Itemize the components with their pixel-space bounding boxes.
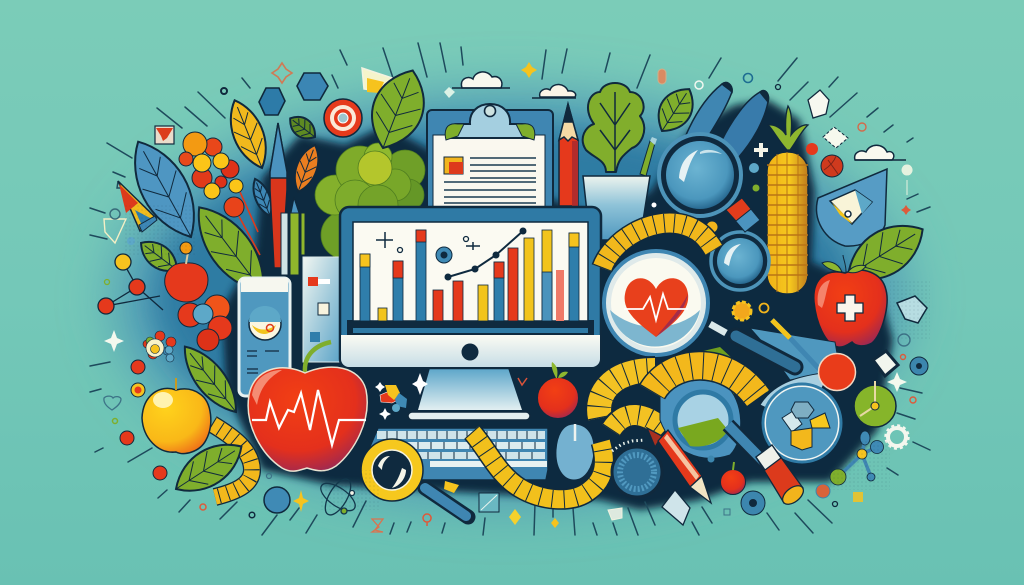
small top-left icons xyxy=(221,63,455,115)
icons under monitor xyxy=(375,373,527,420)
green leaf left xyxy=(134,195,279,304)
top right small icons xyxy=(521,62,912,215)
green dial xyxy=(854,381,896,427)
blue halo xyxy=(115,93,905,503)
radiating lines xyxy=(90,43,930,535)
keyboard xyxy=(362,428,548,480)
berries xyxy=(179,132,260,255)
phone xyxy=(239,278,290,396)
chart icons xyxy=(376,232,480,263)
leaves near apples xyxy=(166,338,251,504)
monitor stand xyxy=(408,368,530,420)
pencils cluster xyxy=(281,198,305,275)
power button xyxy=(462,344,478,360)
large magnifier xyxy=(659,134,741,216)
middle tapes xyxy=(599,370,665,430)
side panel xyxy=(303,257,341,362)
lower magnifier and swoosh xyxy=(660,376,792,490)
bar chart xyxy=(360,230,579,321)
inner blue shade xyxy=(155,126,855,470)
trend line xyxy=(445,228,526,280)
bottom small apple and discs xyxy=(708,456,863,515)
small pink icons xyxy=(117,126,174,188)
atom icon xyxy=(316,475,360,519)
flower and ring xyxy=(733,302,768,320)
red pencil lower xyxy=(647,428,711,503)
right red apple xyxy=(814,255,887,347)
small apple under monitor xyxy=(538,362,578,418)
leaves, upper left xyxy=(118,95,325,248)
potted plant xyxy=(583,83,650,240)
icon: molecule left xyxy=(98,237,163,314)
flower wheel icon xyxy=(143,331,176,362)
cloud right xyxy=(532,84,576,98)
lower left small icons xyxy=(200,474,309,518)
mouse xyxy=(556,424,594,480)
small leaf and brush xyxy=(640,81,702,176)
icon: outline funnel xyxy=(104,209,126,243)
red ball xyxy=(818,354,856,390)
monitor xyxy=(340,207,601,420)
gear wheel xyxy=(612,440,662,497)
blue shield xyxy=(817,169,887,246)
small bottom icons xyxy=(372,481,730,532)
cloud far right xyxy=(855,145,906,160)
dark backdrop xyxy=(222,100,893,510)
red heartbeat apple xyxy=(248,342,367,471)
green leaf right xyxy=(836,211,934,295)
red pencil xyxy=(559,104,578,206)
upper tape arc xyxy=(602,223,714,268)
heart magnifier xyxy=(604,251,708,355)
clipboard clip xyxy=(445,104,535,140)
upper right pens xyxy=(686,82,769,158)
small apple with orange fruits xyxy=(165,242,232,351)
hexagon lens xyxy=(763,384,841,462)
corn xyxy=(767,106,808,294)
clipboard xyxy=(427,104,553,220)
small magnifier xyxy=(711,232,769,290)
gear xyxy=(886,426,908,448)
icon: triangular pencil xyxy=(118,181,157,232)
bottom tape xyxy=(472,432,604,499)
eraser and sparks xyxy=(652,143,818,232)
halftone texture xyxy=(125,205,930,510)
icon: target xyxy=(324,99,362,137)
yellow tape, left xyxy=(212,424,252,497)
yellow apple xyxy=(142,378,211,454)
cloud left xyxy=(452,72,510,88)
report icon xyxy=(444,157,463,174)
handle of heart magnifier xyxy=(710,320,820,370)
lower pen cap xyxy=(756,445,807,508)
pen xyxy=(270,123,287,268)
right small icons xyxy=(873,296,928,403)
small circles lower left xyxy=(104,330,167,480)
yellow magnifier xyxy=(361,439,468,517)
molecule right xyxy=(830,431,884,485)
big leaf top xyxy=(360,62,436,157)
tape over magnifier xyxy=(652,366,758,398)
lettuce xyxy=(315,143,425,259)
green and blue background shapes xyxy=(695,328,840,412)
basketball icon xyxy=(821,155,843,177)
